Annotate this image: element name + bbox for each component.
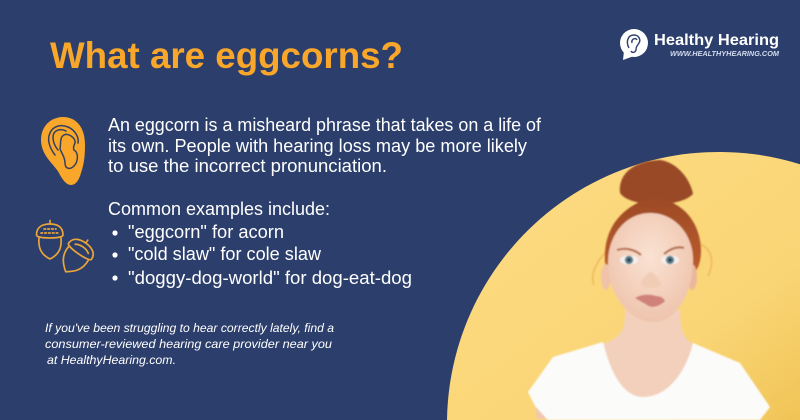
hair xyxy=(605,198,701,272)
examples list: Common examples include: xyxy=(108,199,330,219)
footnote: If you've been struggling to hear correctly lately, find a xyxy=(45,321,334,335)
t-shirt xyxy=(528,342,770,420)
examples list: "cold slaw" for cole slaw xyxy=(128,244,322,264)
hair bun xyxy=(620,160,693,204)
intro text: to use the incorrect pronunciation. xyxy=(108,156,387,176)
intro text: An eggcorn is a misheard phrase that takes on a life of xyxy=(108,115,542,135)
eyebrows xyxy=(617,247,684,255)
arm xyxy=(535,406,549,419)
title: What are eggcorns? xyxy=(50,35,403,76)
footnote xyxy=(45,321,334,367)
logo url: WWW.HEALTHYHEARING.COM xyxy=(670,51,779,58)
icon: acorns xyxy=(36,220,99,280)
ears xyxy=(601,264,611,290)
acorn one xyxy=(36,220,63,259)
nose xyxy=(641,272,661,288)
examples list: "doggy-dog-world" for dog-eat-dog xyxy=(128,268,412,288)
yellow circle xyxy=(447,152,800,420)
logo: Healthy Hearing xyxy=(620,29,779,60)
flyaway hair xyxy=(593,244,712,285)
examples list: "eggcorn" for acorn xyxy=(128,222,284,242)
icon: logo speech bubble with ear xyxy=(620,29,648,60)
photo: woman biting lip xyxy=(528,160,770,420)
intro text xyxy=(108,115,542,176)
neck xyxy=(603,310,694,400)
footnote: at HealthyHearing.com. xyxy=(47,353,176,367)
eyes xyxy=(620,255,679,265)
logo wordmark: Healthy Hearing xyxy=(654,32,779,49)
face xyxy=(608,213,693,322)
icon: ear xyxy=(41,117,85,185)
intro text: its own. People with hearing loss may be more likely xyxy=(108,136,527,156)
examples list xyxy=(108,199,412,288)
acorn two xyxy=(54,232,99,280)
footnote: consumer-reviewed hearing care provider near you xyxy=(45,337,332,351)
mouth xyxy=(635,295,665,307)
